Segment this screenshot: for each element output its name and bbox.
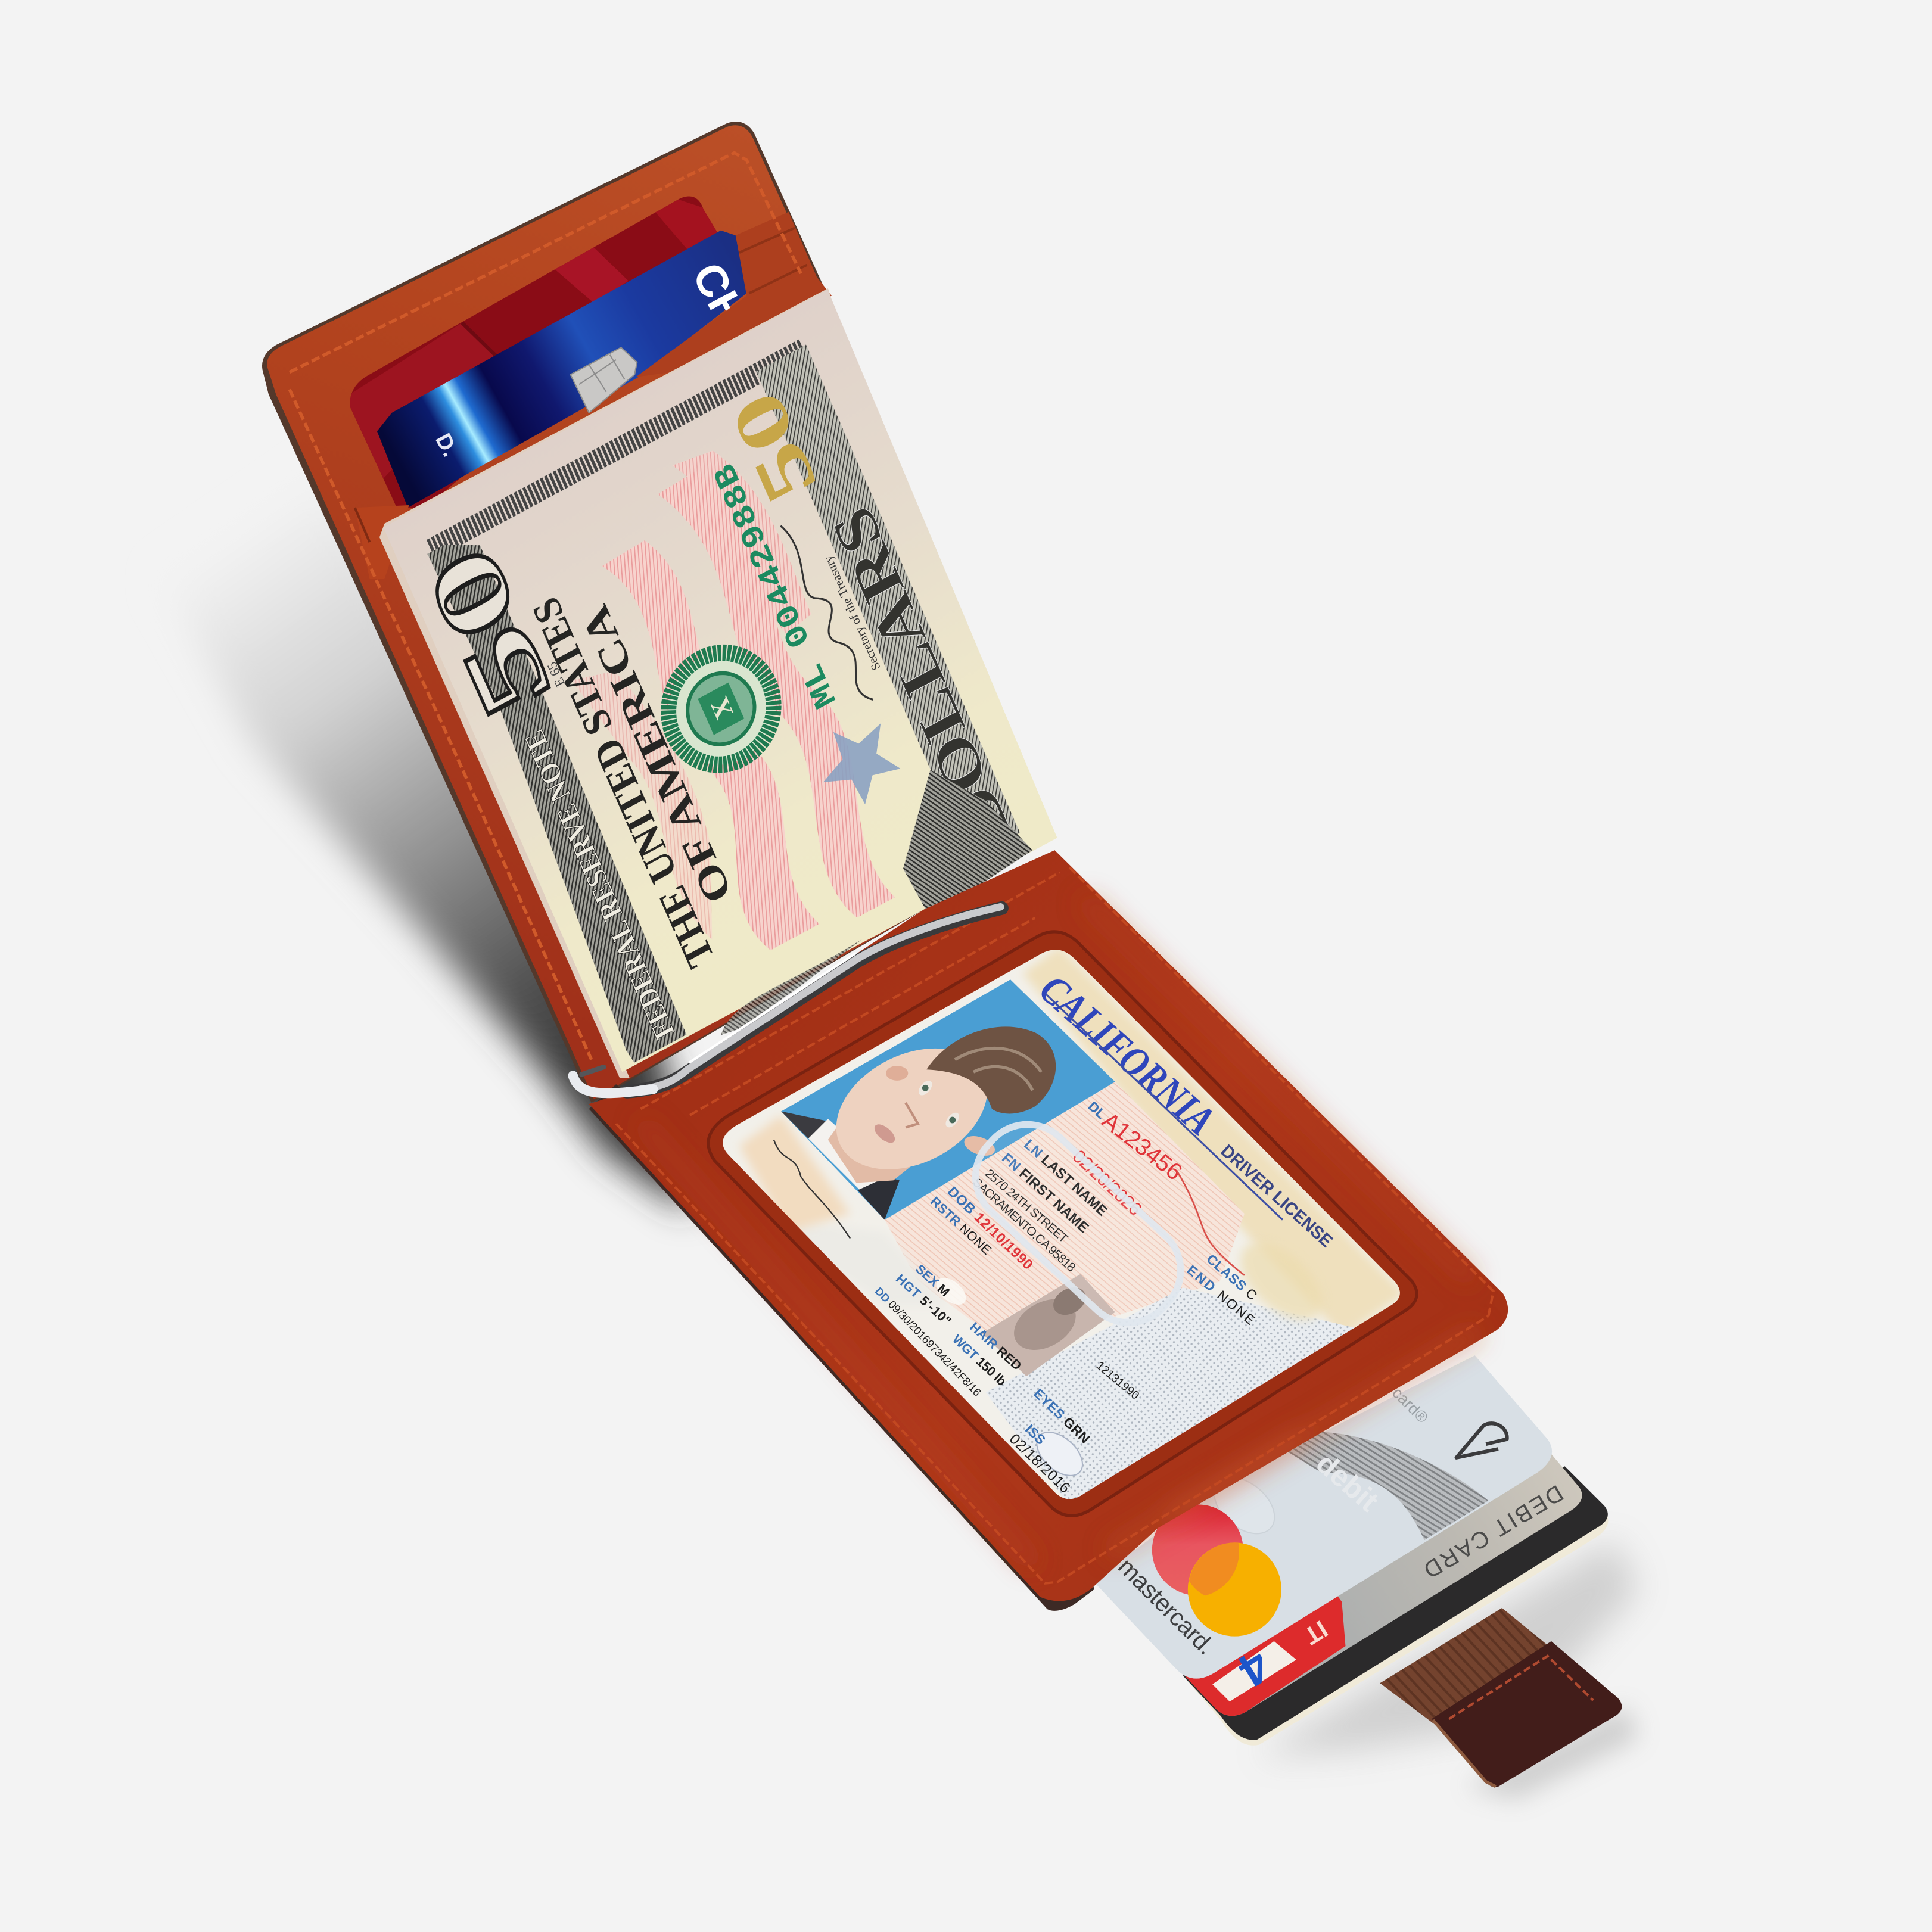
bear seal bbox=[932, 1273, 970, 1310]
white logo box bbox=[1212, 1641, 1296, 1701]
card text CH: CH bbox=[683, 255, 757, 335]
panel: cards sliding out of the bottom bbox=[1093, 1355, 1608, 1746]
DL number label: DL bbox=[1085, 1098, 1109, 1122]
gold 50: 50 bbox=[714, 378, 832, 517]
sex: SEX M bbox=[913, 1261, 953, 1299]
mastercard wordmark: mastercard. bbox=[1113, 1553, 1220, 1660]
paper stack edge bbox=[379, 288, 830, 1078]
tab stitching bbox=[1449, 1656, 1593, 1719]
big 50 numeral: 50 bbox=[404, 529, 573, 737]
panel: driver license behind window bbox=[723, 950, 1400, 1499]
last name: LN LAST NAME bbox=[1021, 1136, 1110, 1219]
engraved top band bbox=[431, 348, 805, 549]
yellow map blot bbox=[1227, 1228, 1336, 1334]
wave ornament bbox=[1029, 1424, 1090, 1484]
lower leather surface bbox=[589, 850, 1508, 1601]
blue number 4: 4 bbox=[1229, 1639, 1279, 1697]
translucent thumb slot bbox=[956, 1105, 1200, 1342]
treasury seal: X bbox=[704, 692, 739, 724]
small series text: E 65 bbox=[545, 659, 568, 689]
red area of debit card bbox=[1096, 1553, 1346, 1716]
pale left area bbox=[788, 1216, 944, 1300]
red debit word fragment: IT bbox=[1299, 1615, 1333, 1650]
upper leather surface bbox=[267, 125, 1047, 1099]
card network word fragment: ercard® bbox=[1379, 1374, 1432, 1427]
mastercard logo bbox=[1152, 1504, 1281, 1637]
panel: upper wallet leaf bbox=[262, 122, 925, 1103]
first name: FN FIRST NAME bbox=[999, 1150, 1092, 1236]
serial number: ML 00442988B bbox=[708, 457, 845, 714]
elastic strap bbox=[1380, 1608, 1555, 1725]
hologram bbox=[1204, 1467, 1285, 1545]
panel: lower wallet leaf bbox=[589, 850, 1508, 1611]
tan license area bbox=[1023, 946, 1405, 1337]
pink license area bbox=[885, 1082, 1245, 1331]
lower leaf dark underside bbox=[589, 1084, 1094, 1611]
bill face bbox=[381, 288, 1066, 1074]
DEBIT CARD label: DEBIT CARD bbox=[1417, 1480, 1568, 1585]
document discriminator: DD 09/30/201697342/42F8/16 bbox=[873, 1284, 984, 1399]
address line 2: SACRAMENTO,CA 95818 bbox=[970, 1175, 1078, 1274]
panel: fifty dollar bill bbox=[379, 288, 1066, 1078]
debit card bbox=[1096, 1454, 1582, 1716]
card text D.: D. bbox=[431, 429, 463, 461]
issue label: ISS bbox=[1022, 1421, 1049, 1448]
blue credit card bbox=[377, 231, 757, 508]
outer dark edge of upper leaf bbox=[262, 122, 1047, 1103]
Secretary of the Treasury: Secretary of the Treasury bbox=[822, 553, 883, 673]
treasurer signature bbox=[779, 518, 873, 708]
driver license label: DRIVER LICENSE bbox=[1217, 1141, 1336, 1251]
cast shadow of wallet bbox=[160, 468, 1639, 1799]
heading rule bbox=[1046, 994, 1283, 1220]
hair: HAIR RED bbox=[967, 1319, 1025, 1373]
card pocket flaps bbox=[355, 212, 832, 579]
restrictions: RSTR NONE bbox=[928, 1193, 994, 1257]
main photo bbox=[781, 979, 1115, 1220]
engraved left band bbox=[412, 530, 693, 1064]
silver mastercard bbox=[1093, 1355, 1552, 1679]
note text: FEDERAL RESERVE NOTE bbox=[518, 724, 680, 1045]
ghost photo bbox=[982, 1274, 1115, 1376]
state map outline bbox=[1177, 1171, 1245, 1275]
DOLLARS lettering: DOLLARS bbox=[819, 495, 1022, 855]
issuer heading: THE UNITED STATES bbox=[523, 590, 723, 975]
class: CLASS C bbox=[1203, 1251, 1261, 1303]
card chip bbox=[571, 347, 637, 413]
black card bbox=[1183, 1466, 1608, 1746]
license heading: California: CALIFORNIA bbox=[1031, 966, 1224, 1144]
dark leather tab bbox=[1432, 1641, 1622, 1787]
silver wave band bbox=[1281, 1432, 1488, 1540]
leather highlights bbox=[640, 900, 1479, 1565]
engraved portrait shoulder bbox=[903, 770, 1032, 918]
blue star bbox=[807, 710, 906, 819]
date of birth: DOB 12/10/1990 bbox=[944, 1183, 1036, 1273]
money clip bbox=[573, 907, 1001, 1093]
dotted license area bbox=[986, 1287, 1368, 1510]
signature bbox=[774, 1140, 850, 1239]
endorsements: END NONE bbox=[1184, 1262, 1258, 1328]
issue date: 02/18/2016 bbox=[1006, 1431, 1073, 1497]
engraved sleeve near clip bbox=[721, 939, 863, 1035]
audit number: 12131990 bbox=[1094, 1359, 1141, 1402]
window lip bbox=[708, 932, 1417, 1516]
treasury seal bbox=[651, 633, 791, 784]
eyes: EYES GRN bbox=[1031, 1386, 1093, 1446]
DL number: A123456 bbox=[1097, 1107, 1187, 1186]
card issuer logo bbox=[1457, 1423, 1507, 1458]
red card in window bbox=[350, 197, 717, 508]
weight: WGT 150 lb bbox=[950, 1331, 1010, 1389]
stitching on upper leaf bbox=[290, 153, 801, 1060]
address line 1: 2570 24TH STREET bbox=[982, 1166, 1071, 1246]
pink flag waves bbox=[515, 433, 929, 997]
expiry date: 02/20/2026 bbox=[1069, 1146, 1146, 1219]
engraved right band bbox=[756, 344, 1020, 860]
lower leaf stitching bbox=[616, 867, 1494, 1583]
license base bbox=[723, 950, 1400, 1499]
issuer heading line two: OF AMERICA bbox=[573, 598, 741, 911]
pull tab bbox=[1380, 1608, 1622, 1787]
debit word: debit bbox=[1310, 1446, 1385, 1518]
height: HGT 5'-10" bbox=[893, 1271, 954, 1328]
orange signature patch bbox=[739, 1115, 850, 1232]
